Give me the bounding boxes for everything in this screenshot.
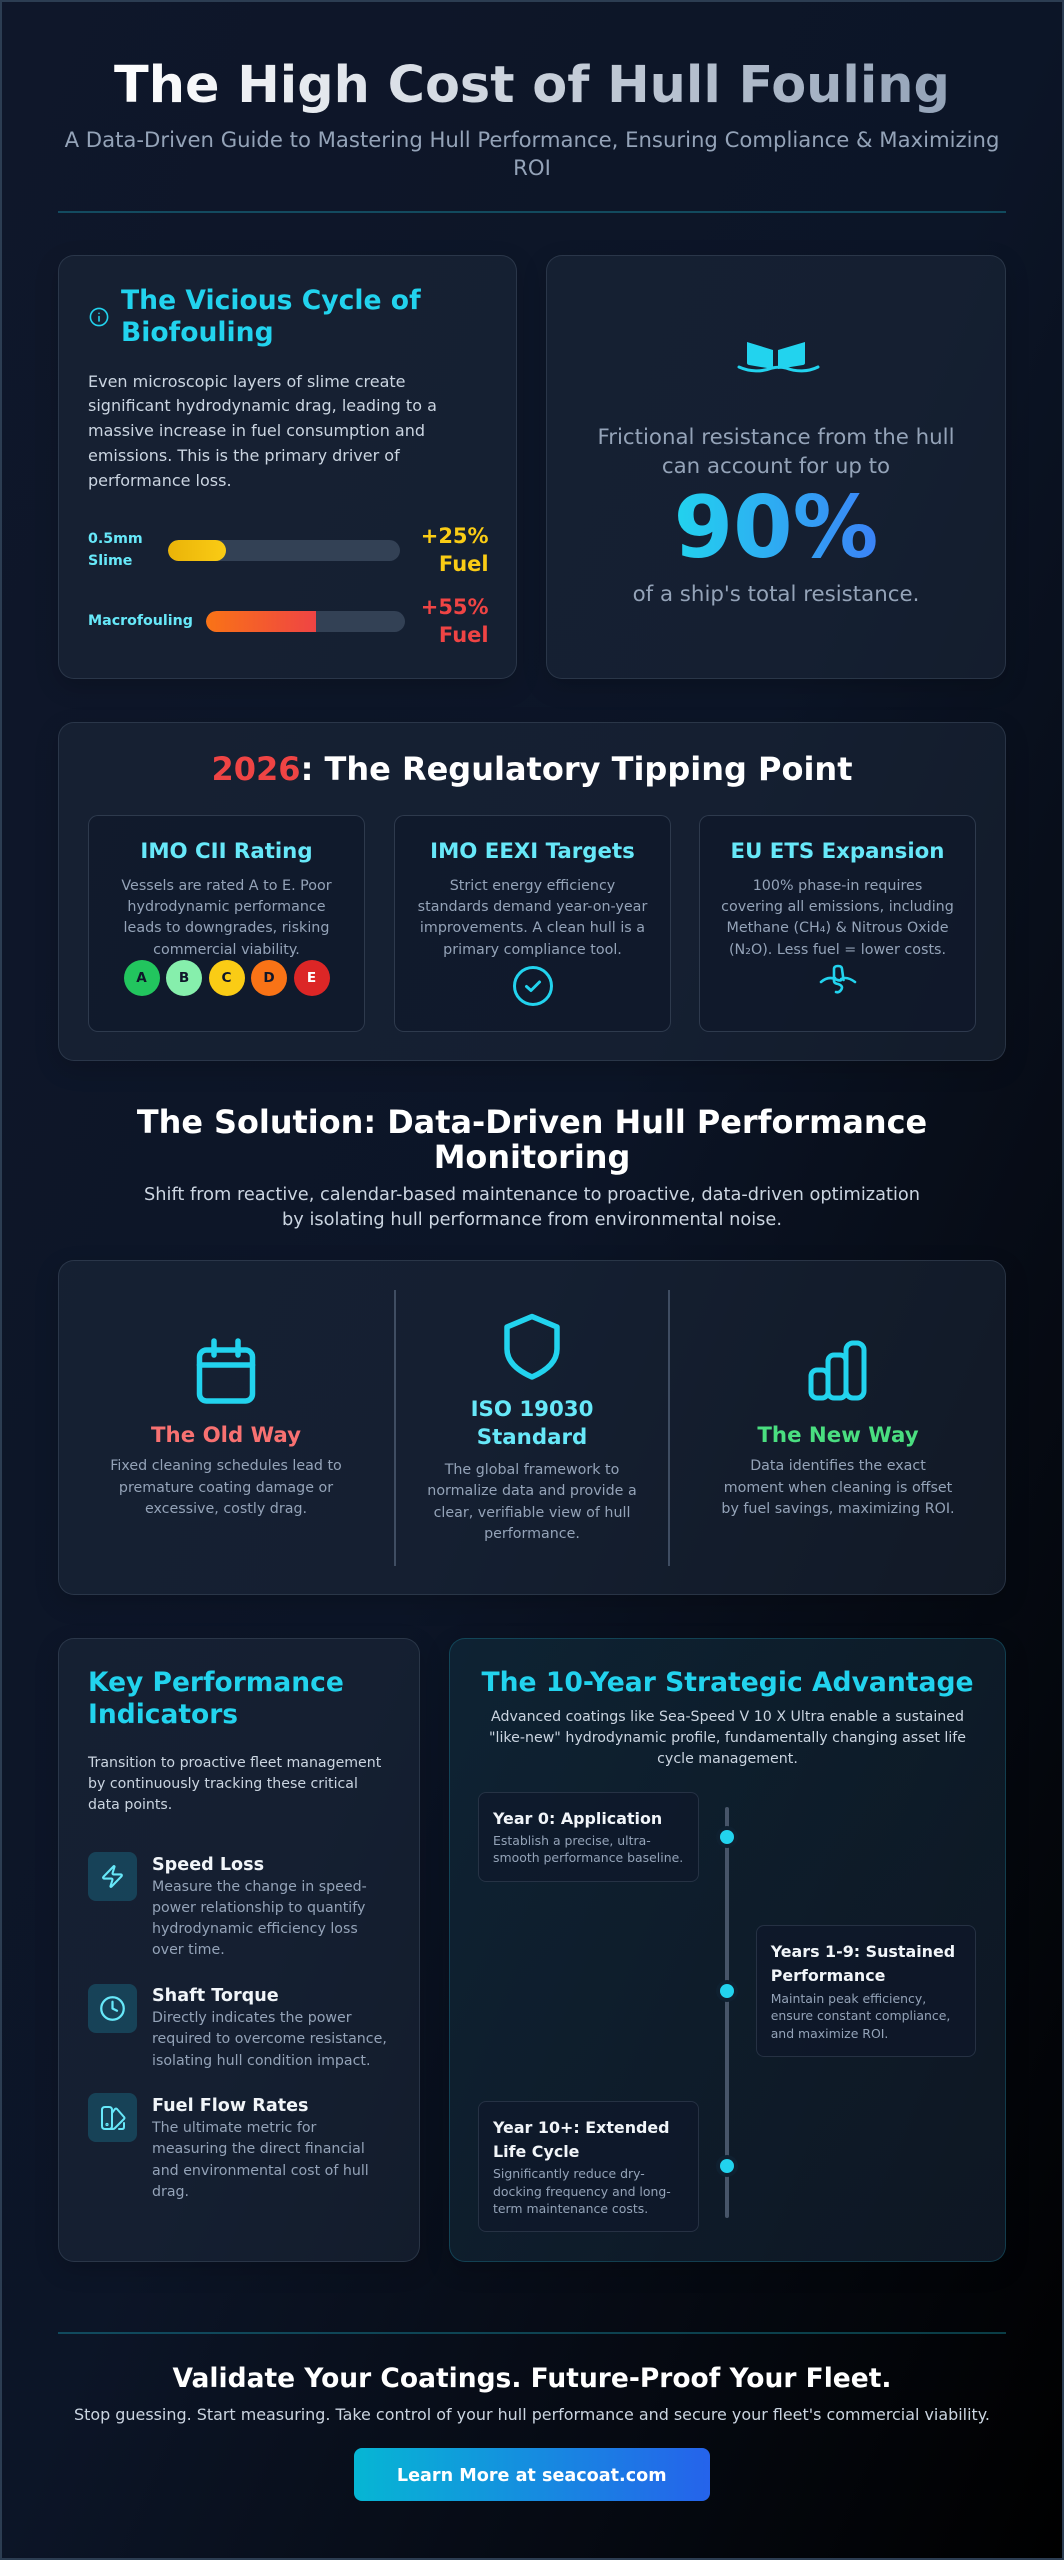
milestone title (492, 2118, 670, 2161)
bar: macrofouling fuel increase (206, 611, 405, 632)
card: IMO EEXI targets (394, 815, 671, 1032)
text: advantage intro: Advanced coatings like Sea-Speed V 10 X Ultra enable a sustained (491, 1709, 964, 1725)
KPI text: speed loss: hydrodynamic efficiency loss (152, 1921, 358, 1937)
heading: the solution: The Solution: Data-Driven Hull Performance (137, 1102, 927, 1140)
column text: ISO standard: normalize data and provide a (427, 1483, 637, 1499)
KPI text: shaft torque: required to overcome resistance, (152, 2031, 387, 2047)
KPI text: fuel flow rates: and environmental cost of hull (152, 2163, 369, 2179)
paragraph: slime drag: Even microscopic layers of slime create (88, 372, 406, 391)
milestone title: Years 1-9: Sustained (771, 1942, 955, 1961)
text: advantage intro: cycle management. (657, 1751, 798, 1767)
column text: new way (721, 1458, 955, 1517)
column text: old way: excessive, costly drag. (145, 1501, 307, 1517)
rating badge E (294, 960, 330, 996)
milestone text: and maximize ROI. (771, 2026, 888, 2041)
card text (418, 878, 648, 958)
heading: regulatory tipping point: 2026: The Regulatory Tipping Point (212, 750, 852, 788)
panel: old way, standard, new way (58, 1260, 1006, 1595)
rating badge A (124, 960, 160, 996)
panel: 10-year strategic advantage (449, 1638, 1006, 2262)
value: +25% fuel: Fuel (439, 552, 489, 576)
footer text: Stop guessing. Start measuring. Take control of your hull performance and secure your fleet's commercial viability. (74, 2405, 990, 2424)
heading: the solution: Monitoring (434, 1138, 630, 1176)
card text (721, 878, 954, 958)
milestone text: Maintain peak efficiency, (771, 1991, 926, 2006)
column title: ISO 19030 standard: Standard (477, 1425, 587, 1450)
card text: leads to downgrades, risking (124, 920, 329, 936)
stat: 90%: 90% (674, 479, 878, 578)
milestone title: Performance (771, 1966, 885, 1985)
KPI text: shaft torque: isolating hull condition impact. (152, 2053, 370, 2069)
card title: IMO EEXI Targets (430, 838, 635, 864)
text: advantage intro: "like-new" hydrodynamic profile, fundamentally changing asset life (489, 1730, 966, 1746)
KPI text: fuel flow rates: The ultimate metric for (152, 2120, 316, 2136)
label: 0.5mm slime: Slime (88, 552, 132, 568)
timeline dot: year 0 (720, 1830, 734, 1844)
value: +25% fuel (421, 524, 489, 576)
value: +55% fuel: +55% (421, 595, 489, 619)
icon: fuel flow (88, 2093, 137, 2142)
icon: calendar (196, 1338, 256, 1404)
heading: 10-year advantage: The 10-Year Strategic Advantage (481, 1667, 974, 1698)
icon: wind and ship squiggle (820, 964, 856, 994)
label: 0.5mm slime: 0.5mm (88, 531, 143, 547)
milestone text (493, 1833, 683, 1865)
call to action button (354, 2448, 710, 2501)
bar: slime fuel increase (168, 540, 400, 561)
milestone text: term maintenance costs. (493, 2201, 648, 2216)
KPI text: speed loss: over time. (152, 1942, 225, 1958)
card text: covering all emissions, including (721, 899, 954, 915)
card title: EU ETS Expansion (731, 838, 944, 864)
milestone text: smooth performance baseline. (493, 1850, 683, 1865)
text: advantage intro (489, 1709, 966, 1767)
panel: 2026 regulatory tipping point (58, 722, 1006, 1061)
text: of total resistance: of a ship's total resistance. (633, 582, 919, 607)
text: KPI intro: data points. (88, 1797, 172, 1813)
value: +25% fuel: +25% (421, 524, 489, 548)
label: 0.5mm slime (88, 531, 143, 568)
header subtitle: ROI (513, 155, 551, 180)
panel: frictional resistance stat (546, 255, 1006, 679)
panel: key performance indicators (58, 1638, 420, 2262)
milestone title: Year 10+: Extended (493, 2118, 670, 2136)
rating badge C (208, 960, 244, 996)
icon: speed loss bolt (88, 1852, 137, 1901)
paragraph: slime drag: performance loss. (88, 471, 232, 490)
KPI text: speed loss: Measure the change in speed- (152, 1879, 367, 1895)
KPI title: fuel flow rates: Fuel Flow Rates (152, 2096, 309, 2116)
text: KPI intro: Transition to proactive fleet management (88, 1755, 381, 1771)
column text: new way: by fuel savings, maximizing ROI. (721, 1501, 955, 1517)
card text: improvements. A clean hull is a (420, 920, 645, 936)
card text: Strict energy efficiency (450, 878, 615, 894)
KPI title: shaft torque: Shaft Torque (152, 1986, 279, 2006)
rating badge E: E (307, 970, 316, 986)
milestone title: Year 0: Application (493, 1809, 662, 1828)
icon: open book on waves (737, 342, 820, 372)
card text (121, 878, 332, 958)
milestone text (493, 2166, 671, 2216)
text: solution intro: by isolating hull performance from environmental noise. (282, 1210, 782, 1230)
text: frictional resistance intro (598, 425, 954, 479)
milestone text (771, 1991, 950, 2041)
icon: check circle (513, 966, 553, 1006)
icon: bar chart (808, 1340, 866, 1400)
KPI text: fuel flow rates: measuring the direct financial (152, 2141, 365, 2157)
milestone title: Life Cycle (493, 2142, 579, 2161)
timeline dot: years 1-9 (720, 1984, 734, 1998)
heading: vicious cycle (121, 285, 421, 348)
column title: ISO 19030 standard: ISO 19030 (471, 1397, 593, 1422)
paragraph: slime drag (88, 372, 437, 490)
column text: old way: premature coating damage or (119, 1480, 333, 1496)
text: solution intro: Shift from reactive, calendar-based maintenance to proactive, data-driven optimization (144, 1184, 920, 1204)
icon: info (90, 308, 108, 326)
header subtitle: A Data-Driven Guide to Mastering Hull Performance, Ensuring Compliance & Maximizing (65, 127, 999, 152)
header subtitle (64, 127, 999, 180)
timeline axis (725, 1807, 729, 2218)
rating badge B: B (179, 970, 189, 986)
column text: new way: moment when cleaning is offset (724, 1480, 952, 1496)
milestone text: docking frequency and long- (493, 2184, 671, 2199)
value: +55% fuel: Fuel (439, 623, 489, 647)
milestone title (770, 1942, 955, 1985)
column text: ISO standard: clear, verifiable view of hull (434, 1505, 630, 1521)
panel: vicious cycle of biofouling (58, 255, 517, 679)
milestone: year 10+ (478, 2101, 699, 2232)
KPI text: shaft torque: Directly indicates the power (152, 2010, 352, 2026)
column text: ISO standard (427, 1462, 637, 1542)
KPI text: shaft torque (152, 2010, 387, 2069)
column title: the old way: The Old Way (151, 1422, 301, 1448)
header title: The High Cost of Hull Fouling (114, 56, 950, 114)
heading: KPIs: Indicators (88, 1699, 238, 1730)
call to action button: Learn More at seacoat.com (397, 2466, 667, 2486)
card: EU ETS expansion (699, 815, 976, 1032)
heading: KPIs (88, 1667, 344, 1730)
card text: primary compliance tool. (443, 942, 622, 958)
KPI title: speed loss: Speed Loss (152, 1855, 264, 1875)
column text: ISO standard: The global framework to (445, 1462, 619, 1478)
card text: Vessels are rated A to E. Poor (121, 878, 332, 894)
heading: KPIs: Key Performance (88, 1667, 344, 1698)
milestone text: Significantly reduce dry- (493, 2166, 645, 2181)
text: frictional resistance intro: Frictional resistance from the hull (598, 425, 954, 450)
card text: standards demand year-on-year (418, 899, 647, 915)
card: IMO CII rating (88, 815, 365, 1032)
card text: 100% phase-in requires (753, 878, 922, 894)
icon: shield (504, 1314, 560, 1380)
KPI text: speed loss: power relationship to quantify (152, 1900, 365, 1916)
card title: IMO CII Rating (140, 838, 313, 864)
column text: old way (110, 1458, 342, 1517)
milestone: year 0 (478, 1792, 699, 1882)
card text: commercial viability. (153, 942, 300, 958)
text: frictional resistance intro: can account for up to (662, 454, 890, 479)
heading: vicious cycle: Biofouling (121, 317, 274, 348)
rating badge A: A (136, 970, 147, 986)
milestone text: Establish a precise, ultra- (493, 1833, 651, 1848)
rating badge D: D (263, 970, 275, 986)
timeline dot: year 10+ (720, 2159, 734, 2173)
icon: shaft torque clock (88, 1984, 137, 2033)
column text: ISO standard: performance. (484, 1526, 580, 1542)
rating badge C: C (222, 970, 231, 986)
rating badge B (166, 960, 202, 996)
milestone: years 1-9 (756, 1925, 976, 2057)
heading: vicious cycle: The Vicious Cycle of (121, 285, 421, 316)
column title: the new way: The New Way (757, 1422, 919, 1448)
column text: new way: Data identifies the exact (750, 1458, 926, 1474)
footer heading: Validate Your Coatings. Future-Proof Your Fleet. (172, 2363, 892, 2394)
KPI text: fuel flow rates (152, 2120, 369, 2200)
paragraph: slime drag: significant hydrodynamic drag, leading to a (88, 396, 437, 415)
card text: Methane (CH₄) & Nitrous Oxide (726, 920, 948, 936)
label: macrofouling: Macrofouling (88, 613, 193, 629)
paragraph: slime drag: massive increase in fuel consumption and (88, 421, 425, 440)
KPI text: speed loss (152, 1879, 367, 1958)
text: solution intro (144, 1184, 920, 1230)
card text: hydrodynamic performance (127, 899, 326, 915)
column text: old way: Fixed cleaning schedules lead to (110, 1458, 342, 1474)
column title: ISO 19030 standard (471, 1397, 593, 1450)
text: KPI intro: by continuously tracking these critical (88, 1776, 358, 1792)
paragraph: slime drag: emissions. This is the primary driver of (88, 446, 400, 465)
card text: (N₂O). Less fuel = lower costs. (729, 942, 946, 958)
value: +55% fuel (421, 595, 489, 647)
heading: the solution (137, 1102, 927, 1176)
milestone text: ensure constant compliance, (771, 2008, 950, 2023)
text: KPI intro (88, 1755, 381, 1813)
rating badge D (251, 960, 287, 996)
KPI text: fuel flow rates: drag. (152, 2184, 189, 2200)
